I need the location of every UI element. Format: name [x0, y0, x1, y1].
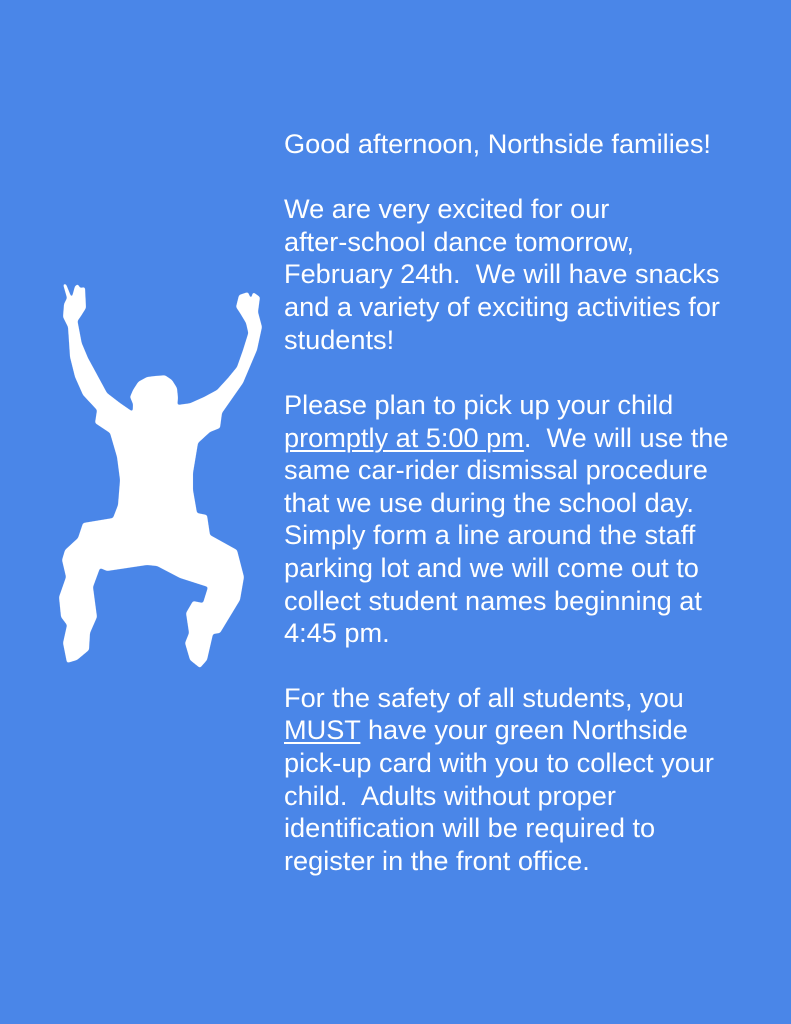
text block: greeting: Good afternoon, Northside families!: [284, 128, 711, 159]
text block: dance announcement: We are very excited for our after-school dance tomorrow, February 24th. We will have snacks and a variety of exciting activities for students!: [284, 193, 720, 355]
text block: pick-up instructions: Please plan to pick up your child promptly at 5:00 pm. We will use the same car-rider dismissal procedure that we use during the school day. Simply form a line around the staff parking lot and we will come out to collect student names beginning at 4:45 pm.: [284, 389, 729, 648]
text block: safety requirement: For the safety of all students, you MUST have your green Northside pick-up card with you to collect your child. Adults without proper identification will be required to register in the front office.: [284, 682, 714, 876]
icon: jumping person silhouette: [59, 284, 262, 668]
